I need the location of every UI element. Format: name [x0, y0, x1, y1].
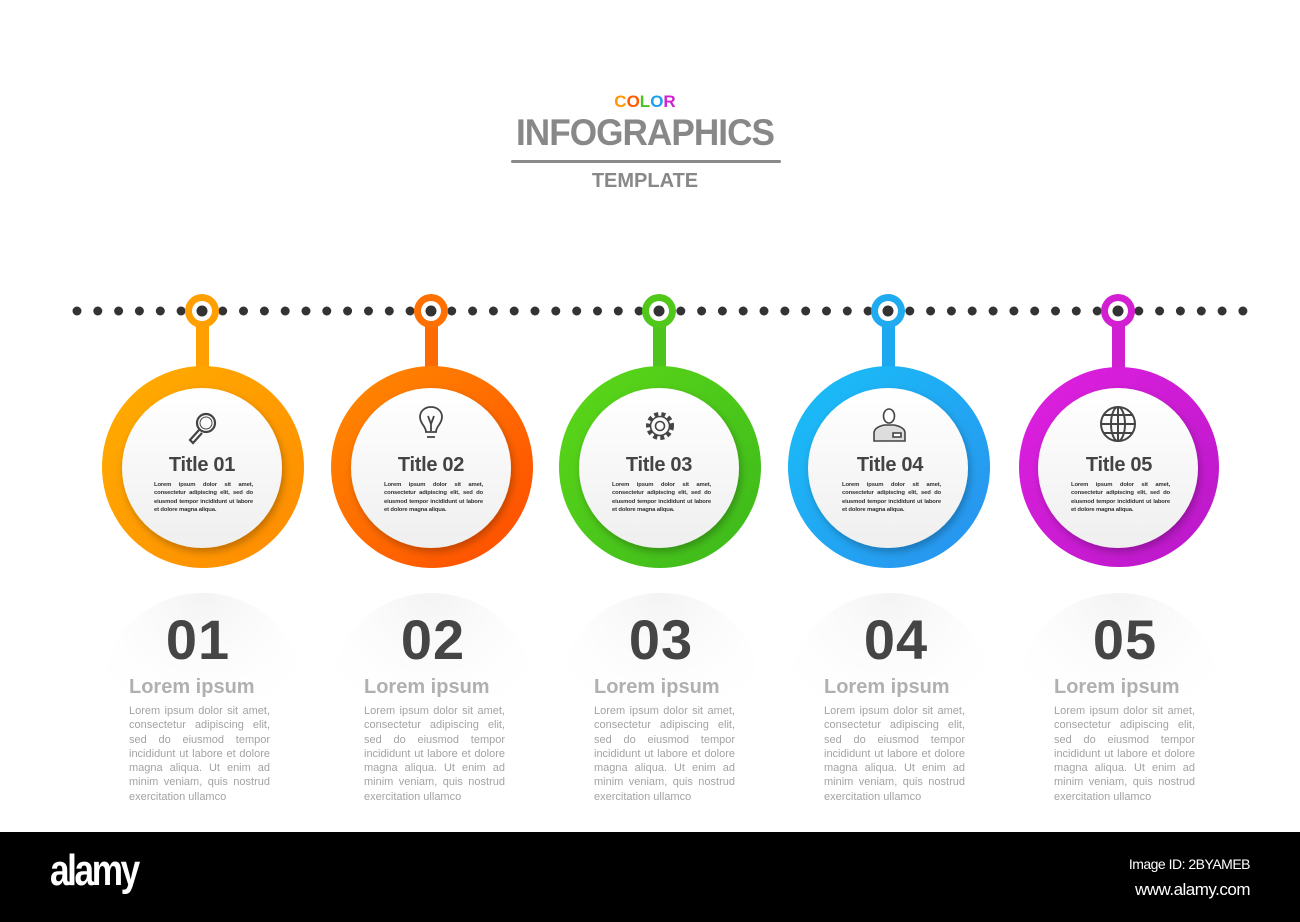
panel 2 text	[364, 454, 505, 803]
paragraph 03: Lorem ipsum dolor sit amet, consectetur adipiscing elit, sed do eiusmod tempor incididunt ut labore et dolore magna aliqua. Ut enim ad minim veniam, quis nostrud exercitation ullamco	[594, 705, 735, 803]
number 01: 01	[166, 608, 230, 671]
title: COLOR: COLOR	[614, 92, 676, 111]
title underline	[511, 160, 781, 163]
icon: user	[874, 409, 905, 441]
footer url: www.alamy.com	[1135, 880, 1250, 899]
title: TEMPLATE: TEMPLATE	[592, 170, 698, 192]
step 3 circle	[559, 294, 761, 568]
number 03: 03	[629, 608, 693, 671]
icon: globe	[1101, 407, 1135, 441]
step 1 circle	[102, 294, 304, 568]
title 05: Title 05	[1086, 454, 1152, 476]
footer bar	[0, 832, 1300, 922]
inner paragraph 01: Lorem ipsum dolor sit amet, consectetur adipiscing elit, sed do eiusmod tempor incididunt ut labore et dolore magna aliqua.	[154, 482, 253, 513]
number 02: 02	[401, 608, 465, 671]
panel 4 text	[824, 454, 965, 803]
title 04: Title 04	[857, 454, 923, 476]
heading lorem 05: Lorem ipsum	[1054, 676, 1180, 698]
dotted timeline	[72, 306, 1247, 316]
paragraph 05: Lorem ipsum dolor sit amet, consectetur adipiscing elit, sed do eiusmod tempor incididunt ut labore et dolore magna aliqua. Ut enim ad minim veniam, quis nostrud exercitation ullamco	[1054, 705, 1195, 803]
step 5 circle	[1019, 294, 1219, 567]
inner paragraph 02: Lorem ipsum dolor sit amet, consectetur adipiscing elit, sed do eiusmod tempor incididunt ut labore et dolore magna aliqua.	[384, 482, 483, 513]
title block	[511, 92, 781, 192]
inner paragraph 05: Lorem ipsum dolor sit amet, consectetur adipiscing elit, sed do eiusmod tempor incididunt ut labore et dolore magna aliqua.	[1071, 482, 1170, 513]
inner paragraph 04: Lorem ipsum dolor sit amet, consectetur adipiscing elit, sed do eiusmod tempor incididunt ut labore et dolore magna aliqua.	[842, 482, 941, 513]
number 05: 05	[1093, 608, 1157, 671]
number 04: 04	[864, 608, 928, 671]
heading lorem 01: Lorem ipsum	[129, 676, 255, 698]
title 03: Title 03	[626, 454, 692, 476]
heading lorem 03: Lorem ipsum	[594, 676, 720, 698]
panel 1 text	[129, 454, 270, 803]
paragraph 04: Lorem ipsum dolor sit amet, consectetur adipiscing elit, sed do eiusmod tempor incididunt ut labore et dolore magna aliqua. Ut enim ad minim veniam, quis nostrud exercitation ullamco	[824, 705, 965, 803]
footer logo: alamy	[50, 846, 138, 895]
icon: gear	[648, 414, 672, 438]
footer id: Image ID: 2BYAMEB	[1129, 856, 1250, 872]
heading lorem 04: Lorem ipsum	[824, 676, 950, 698]
title 01: Title 01	[169, 454, 235, 476]
icon: lightbulb	[420, 407, 442, 437]
title 02: Title 02	[398, 454, 464, 476]
step 4 circle	[788, 294, 990, 568]
inner paragraph 03: Lorem ipsum dolor sit amet, consectetur adipiscing elit, sed do eiusmod tempor incididunt ut labore et dolore magna aliqua.	[612, 482, 711, 513]
paragraph 02: Lorem ipsum dolor sit amet, consectetur adipiscing elit, sed do eiusmod tempor incididunt ut labore et dolore magna aliqua. Ut enim ad minim veniam, quis nostrud exercitation ullamco	[364, 705, 505, 803]
heading lorem 02: Lorem ipsum	[364, 676, 490, 698]
lower faded circles	[103, 593, 1219, 787]
title: INFOGRAPHICS: INFOGRAPHICS	[516, 112, 774, 153]
panel 5 text	[1054, 454, 1195, 803]
paragraph 01: Lorem ipsum dolor sit amet, consectetur adipiscing elit, sed do eiusmod tempor incididunt ut labore et dolore magna aliqua. Ut enim ad minim veniam, quis nostrud exercitation ullamco	[129, 705, 270, 803]
icon: magnifier	[190, 414, 215, 443]
step 2 circle	[331, 294, 533, 568]
panel 3 text	[594, 454, 735, 803]
